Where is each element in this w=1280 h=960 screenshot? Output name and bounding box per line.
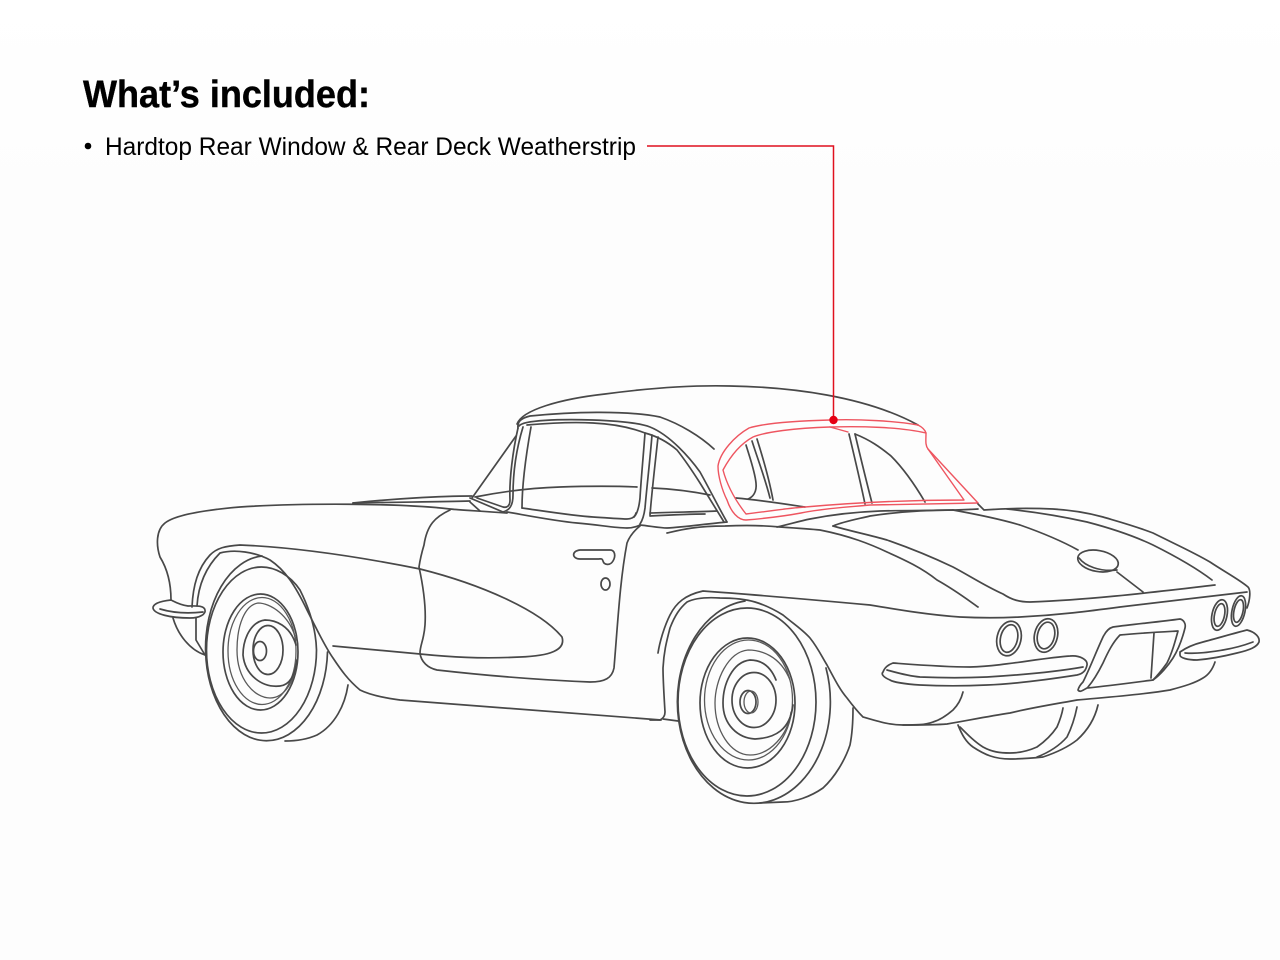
title: What’s included: [83, 74, 370, 116]
front bumper [153, 600, 205, 618]
red rear window weatherstrip [718, 420, 978, 520]
leader line [647, 146, 838, 424]
license plate surround [1078, 619, 1185, 691]
rear window interior [736, 434, 925, 507]
rear deck and trunk [833, 504, 1250, 608]
rear bumpers [882, 630, 1259, 686]
front body [157, 496, 661, 720]
front wheel [206, 556, 348, 741]
tail lights [993, 594, 1248, 658]
far rear wheel [958, 705, 1098, 759]
car line drawing [153, 146, 1259, 803]
door handle and lock [574, 550, 615, 590]
side windows and pillars [470, 420, 978, 607]
rear body [650, 591, 1247, 725]
rear wheel [663, 601, 853, 803]
roof [517, 386, 918, 449]
bullet list item: Hardtop Rear Window & Rear Deck Weatherstrip [105, 133, 636, 161]
